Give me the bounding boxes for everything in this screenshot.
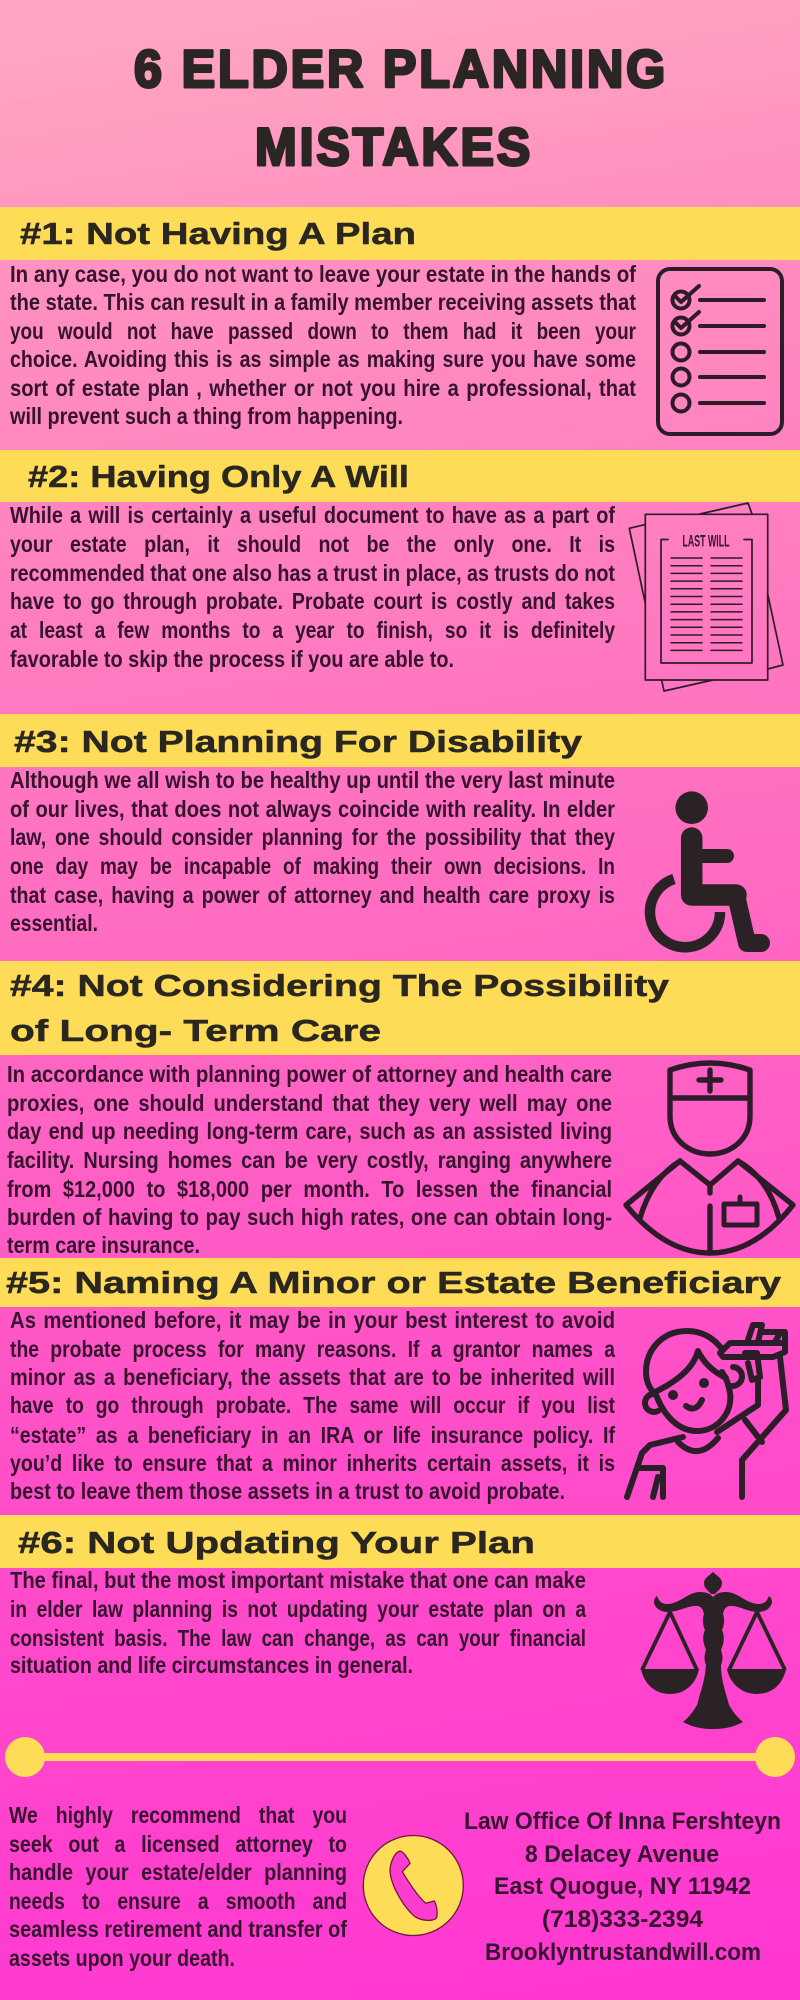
panel: mistake 2 bbox=[0, 450, 800, 691]
text block: recommendation: assets upon your death. bbox=[9, 1945, 235, 1971]
heading bar: #2: #2: Having Only A Will bbox=[28, 460, 409, 494]
text block: mistake 4: proxies, one should understand that they very well may one bbox=[7, 1090, 612, 1116]
heading bar: #2 bbox=[0, 450, 800, 502]
text block: mistake 5: have to go through probate. The same will occur if you list bbox=[10, 1392, 615, 1418]
heading bar: #4 bbox=[0, 961, 800, 1055]
icon: checklist bbox=[658, 269, 782, 434]
panel: mistake 1 bbox=[0, 207, 800, 434]
panel: mistake 6 bbox=[0, 1515, 800, 1729]
heading bar: #5 bbox=[0, 1258, 800, 1307]
heading bar: #3: #3: Not Planning For Disability bbox=[14, 725, 582, 759]
text block: mistake 4: from $12,000 to $18,000 per month. To lessen the financial bbox=[7, 1176, 612, 1202]
icon: last will document bbox=[629, 503, 783, 691]
text block: mistake 4: day end up needing long-term care, such as an assisted living bbox=[7, 1118, 612, 1144]
contact details: Law Office Of Inna Fershteyn bbox=[464, 1808, 781, 1835]
text block: mistake 1: sort of estate plan , whether or not you hire a professional, that bbox=[10, 375, 636, 401]
text block: mistake 1: choice. Avoiding this is as simple as making sure you have some bbox=[10, 346, 636, 372]
text block: mistake 1: will prevent such a thing from happening. bbox=[9, 403, 403, 429]
text block: mistake 5: the probate process for many reasons. If a grantor names a bbox=[10, 1336, 615, 1362]
text block: recommendation: needs to ensure a smooth and bbox=[9, 1888, 347, 1914]
text block: mistake 4: In accordance with planning power of attorney and health care bbox=[7, 1061, 612, 1087]
heading bar: #4: #4: Not Considering The Possibility bbox=[10, 969, 669, 1003]
text block: mistake 3: one day may be incapable of making their own decisions. In bbox=[10, 853, 615, 879]
text block: mistake 2: have to go through probate. Probate court is costly and takes bbox=[10, 588, 615, 614]
heading bar: #1: #1: Not Having A Plan bbox=[20, 217, 416, 251]
heading bar: #5: #5: Naming A Minor or Estate Beneficiary bbox=[6, 1266, 781, 1300]
text block: mistake 5: As mentioned before, it may be in your best interest to avoid bbox=[10, 1307, 615, 1333]
heading bar: #4: of Long- Term Care bbox=[10, 1014, 381, 1048]
text block: mistake 2: recommended that one also has a trust in place, as trusts do not bbox=[10, 560, 615, 586]
contact details bbox=[464, 1808, 781, 1966]
text block: mistake 6 bbox=[10, 1567, 586, 1678]
text block: mistake 6: The final, but the most important mistake that one can make bbox=[10, 1567, 586, 1593]
text block: recommendation bbox=[9, 1802, 347, 1971]
icon: wheelchair bbox=[650, 791, 761, 947]
heading bar: #6: #6: Not Updating Your Plan bbox=[18, 1526, 535, 1560]
heading bar: #6 bbox=[0, 1515, 800, 1568]
text block: mistake 4: term care insurance. bbox=[7, 1232, 200, 1258]
divider with end circles bbox=[5, 1737, 795, 1777]
icon: child with paper plane bbox=[627, 1325, 786, 1497]
text block: mistake 5 bbox=[10, 1307, 615, 1504]
text block: mistake 3: Although we all wish to be healthy up until the very last minute bbox=[10, 767, 615, 793]
text block: mistake 5: best to leave them those assets in a trust to avoid probate. bbox=[10, 1478, 565, 1504]
text block: mistake 4: facility. Nursing homes can be very costly, ranging anywhere bbox=[7, 1147, 612, 1173]
icon: last will document: LAST WILL bbox=[682, 532, 730, 550]
text block: mistake 3: essential. bbox=[10, 910, 98, 936]
contact details: 8 Delacey Avenue bbox=[525, 1841, 719, 1868]
text block: mistake 2: your estate plan, it should not be the only one. It is bbox=[10, 531, 615, 557]
title: 6 ELDER PLANNING bbox=[134, 40, 668, 99]
text block: mistake 6: consistent basis. The law can change, as can your financial bbox=[10, 1625, 586, 1651]
text block: mistake 2 bbox=[10, 502, 615, 672]
text block: mistake 6: situation and life circumstances in general. bbox=[10, 1652, 413, 1678]
icon: nurse bbox=[626, 1063, 793, 1253]
contact details: Brooklyntrustandwill.com bbox=[485, 1939, 761, 1966]
heading bar: #1 bbox=[0, 207, 800, 260]
text block: recommendation: We highly recommend that you bbox=[9, 1802, 347, 1828]
text block: mistake 6: in elder law planning is not updating your estate plan on a bbox=[10, 1596, 586, 1622]
title: MISTAKES bbox=[255, 118, 533, 177]
text block: mistake 4 bbox=[7, 1061, 612, 1258]
text block: mistake 1: you would not have passed down to them had it been your bbox=[10, 318, 636, 344]
text block: mistake 1: In any case, you do not want to leave your estate in the hands of bbox=[10, 261, 636, 287]
heading bar: #3 bbox=[0, 714, 800, 767]
text block: mistake 4: burden of having to pay such high rates, one can obtain long- bbox=[7, 1204, 612, 1230]
title bbox=[134, 40, 668, 177]
text block: mistake 1: the state. This can result in a family member receiving assets that bbox=[10, 289, 636, 315]
panel: mistake 4 bbox=[0, 961, 800, 1258]
text block: recommendation: handle your estate/elder planning bbox=[9, 1859, 347, 1885]
text block: recommendation: seek out a licensed attorney to bbox=[9, 1831, 347, 1857]
text block: mistake 5: minor as a beneficiary, the assets that are to be inherited will bbox=[10, 1364, 615, 1390]
text block: mistake 2: at least a few months to a year to finish, so it is definitely bbox=[10, 617, 615, 643]
text block: mistake 3 bbox=[10, 767, 615, 936]
panel: mistake 3 bbox=[0, 714, 800, 947]
contact details: (718)333-2394 bbox=[542, 1906, 704, 1933]
text block: mistake 2: favorable to skip the process if you are able to. bbox=[10, 646, 454, 672]
icon: phone in circle bbox=[363, 1836, 463, 1936]
text block: mistake 3: of our lives, that does not always coincide with reality. In elder bbox=[10, 796, 615, 822]
text block: mistake 3: that case, having a power of attorney and health care proxy is bbox=[10, 882, 615, 908]
contact details: East Quogue, NY 11942 bbox=[494, 1873, 751, 1900]
text block: mistake 5: “estate” as a beneficiary in an IRA or life insurance policy. If bbox=[10, 1422, 615, 1448]
text block: mistake 1 bbox=[9, 261, 636, 429]
text block: mistake 5: you’d like to ensure that a minor inherits certain assets, it is bbox=[10, 1450, 615, 1476]
panel: mistake 5 bbox=[0, 1258, 800, 1504]
icon: scales of justice bbox=[641, 1572, 786, 1729]
text block: mistake 3: law, one should consider planning for the possibility that they bbox=[10, 824, 615, 850]
text block: recommendation: seamless retirement and transfer of bbox=[9, 1916, 347, 1942]
text block: mistake 2: While a will is certainly a useful document to have as a part of bbox=[10, 502, 615, 528]
